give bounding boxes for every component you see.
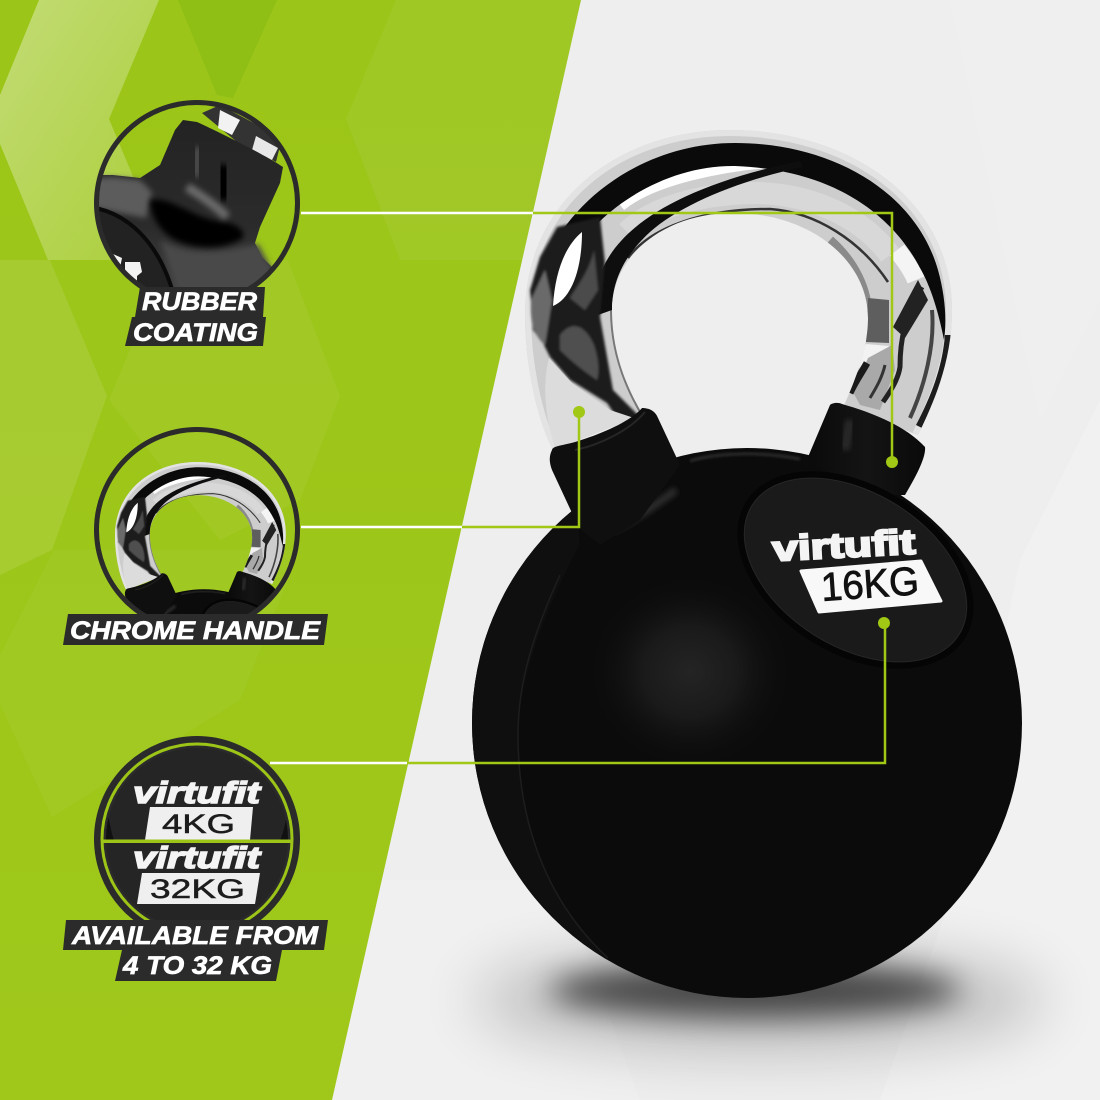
kettlebell photo (440, 130, 1022, 1000)
right collar (808, 403, 925, 495)
rubber coating label: RUBBER (142, 288, 257, 316)
rubber close-up photo (99, 107, 283, 287)
outer rim (525, 130, 952, 450)
callout circle: available weights (63, 738, 328, 981)
emblem text: virtufit 16KG (771, 523, 941, 612)
logo emblem ellipse (702, 430, 1009, 710)
rubber coating label: COATING (133, 319, 258, 347)
32KG emblem: virtufit (133, 840, 262, 875)
collar highlights (575, 412, 850, 450)
callout circle: rubber coating (90, 102, 298, 347)
connector: chrome handle (301, 406, 585, 527)
4KG emblem: 4KG (162, 809, 235, 839)
brand logo: virtufit (771, 523, 917, 569)
4KG emblem: virtufit (133, 775, 262, 810)
left collar (550, 408, 680, 545)
callout circle: chrome handle (63, 427, 328, 645)
4KG emblem (106, 780, 288, 840)
32KG emblem (134, 845, 262, 904)
rubber coating label (125, 287, 266, 347)
connector: rubber coating (301, 213, 898, 468)
green panel with hexagon facets (0, 0, 581, 1100)
green divider (101, 840, 293, 843)
small kettlebell thumbnail (115, 462, 286, 614)
chrome reflections (627, 193, 890, 255)
availability label: 4 TO 32 KG (122, 952, 272, 980)
availability label (63, 920, 328, 981)
chrome handle label: CHROME HANDLE (70, 617, 321, 645)
32KG emblem: 32KG (150, 874, 245, 904)
availability label: AVAILABLE FROM (71, 922, 319, 950)
connector: weight emblem (270, 617, 890, 763)
chrome handle (525, 130, 952, 450)
weight plate label: 16KG (820, 559, 920, 610)
floor shadow (475, 950, 1045, 1050)
rubber ball body (440, 448, 1022, 1000)
